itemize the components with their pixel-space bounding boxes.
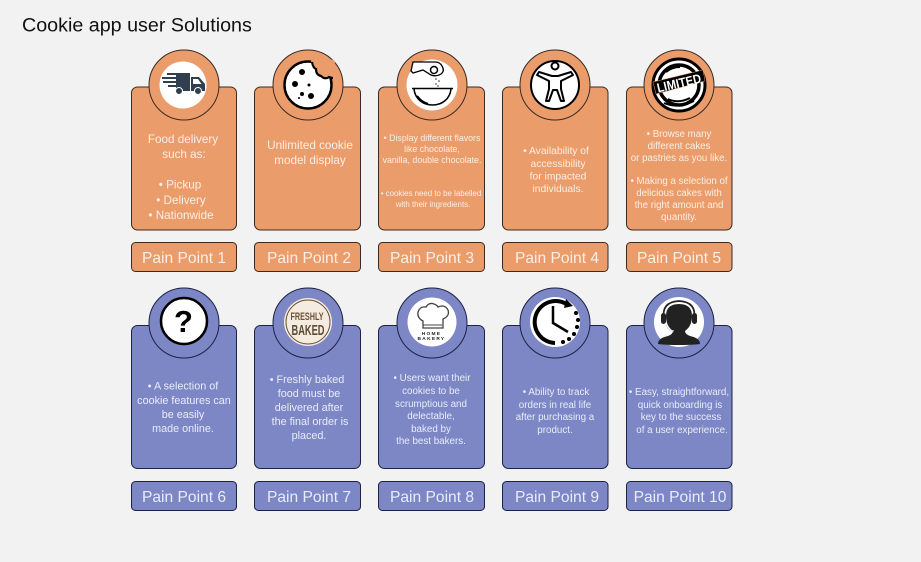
- text: best bakers: delectable,: [407, 411, 455, 422]
- text: delivery options: Food delivery: [148, 133, 218, 146]
- panel: pain point 4: [502, 50, 608, 230]
- text: cookie features: be easily: [162, 409, 205, 421]
- text: accessibility: • Availability of: [523, 146, 589, 157]
- title: Cookie app user Solutions: [22, 14, 252, 36]
- label: pain point 4: [502, 242, 608, 272]
- icon: freshly baked badge: BAKED: [292, 322, 325, 339]
- icon: bitten cookie: [273, 50, 343, 120]
- label: pain point 9: [502, 482, 608, 510]
- panel: pain point 1: [132, 50, 236, 230]
- label: pain point 7: [254, 482, 360, 510]
- label: pain point 2: [254, 242, 360, 272]
- text: fresh delivery: the final order is: [272, 416, 349, 428]
- label: pain point 1: [132, 242, 236, 272]
- text: cookie features: made online.: [152, 423, 214, 435]
- text: flavors and ingredients: with their ingredients.: [395, 200, 470, 209]
- text: flavors and ingredients: vanilla, double chocolate.: [383, 155, 481, 165]
- icon: home bakery logo: [397, 288, 467, 358]
- icon: freshly baked badge: FRESHLY: [290, 311, 324, 323]
- text: fresh delivery: placed.: [292, 430, 326, 442]
- panel: pain point 5: [626, 50, 732, 230]
- text: best bakers: [394, 373, 471, 447]
- text: order tracking: • Ability to track: [523, 387, 589, 398]
- panel: pain point 7: [254, 288, 360, 468]
- text: accessibility: individuals.: [533, 184, 583, 195]
- text: flavors and ingredients: [381, 133, 481, 209]
- label: pain point 10: Pain Point 10: [634, 489, 727, 506]
- icon: home bakery logo: HOME: [422, 331, 441, 337]
- text: delivery options: • Pickup: [159, 178, 202, 192]
- panel: pain point 9: [502, 288, 608, 468]
- text: flavors and ingredients: • Display different flavors: [384, 133, 481, 143]
- text: cookie features: cookie features can: [137, 395, 231, 407]
- icon: home bakery logo: BAKERY: [418, 336, 445, 342]
- label: pain point 7: Pain Point 7: [267, 489, 351, 506]
- text: browse and select: [630, 129, 728, 223]
- text: onboarding: of a user experience.: [636, 425, 728, 436]
- icon: question mark: [149, 288, 219, 358]
- icon: question mark: ?: [174, 304, 193, 339]
- label: pain point 8: [378, 482, 484, 510]
- label: pain point 6: Pain Point 6: [142, 489, 226, 506]
- text: onboarding: [629, 387, 729, 436]
- text: delivery options: • Delivery: [156, 194, 206, 207]
- text: browse and select: different cakes: [648, 141, 711, 152]
- label: pain point 2: Pain Point 2: [267, 250, 351, 267]
- icon: limited stamp: [644, 50, 714, 120]
- text: order tracking: product.: [537, 425, 573, 436]
- text: best bakers: the best bakers.: [396, 436, 466, 447]
- label: pain point 3: Pain Point 3: [390, 250, 474, 267]
- panel: pain point 2: [254, 50, 360, 230]
- text: cookie features: • A selection of: [148, 380, 219, 392]
- label: pain point 3: [378, 242, 484, 272]
- text: onboarding: key to the success: [641, 412, 721, 423]
- icon: hand sprinkling into bowl: [397, 50, 467, 120]
- text: browse and select: • Browse many: [647, 129, 712, 140]
- text: fresh delivery: [270, 374, 349, 442]
- panel: pain point 8: [378, 288, 484, 468]
- text: delivery options: • Nationwide: [148, 209, 214, 222]
- text: fresh delivery: food must be: [278, 388, 340, 400]
- text: fresh delivery: • Freshly baked: [270, 374, 344, 386]
- text: browse and select: the right amount and: [635, 200, 723, 211]
- icon: clock: [520, 288, 590, 358]
- text: cookie display: model display: [274, 154, 346, 167]
- text: onboarding: • Easy, straightforward,: [629, 387, 729, 398]
- text: accessibility: accessibility: [531, 159, 586, 170]
- label: pain point 6: [132, 482, 236, 510]
- text: fresh delivery: delivered after: [275, 402, 344, 414]
- text: onboarding: quick onboarding is: [638, 400, 722, 411]
- text: accessibility: for impacted: [530, 172, 587, 182]
- text: order tracking: [516, 387, 595, 436]
- panel: pain point 6: [132, 288, 236, 468]
- text: browse and select: quantity.: [661, 212, 697, 223]
- panel: pain point 10: [626, 288, 732, 468]
- icon: accessibility figure: [520, 50, 590, 120]
- text: delivery options: such as:: [162, 148, 206, 161]
- label: pain point 10: [626, 482, 732, 510]
- label: pain point 1: Pain Point 1: [142, 250, 226, 267]
- icon: delivery truck: [149, 50, 219, 120]
- label: pain point 9: Pain Point 9: [515, 489, 599, 506]
- text: cookie features: [137, 380, 231, 435]
- text: flavors and ingredients: like chocolate,: [404, 144, 460, 154]
- label: pain point 5: Pain Point 5: [637, 250, 721, 267]
- text: browse and select: • Making a selection of: [630, 176, 728, 187]
- text: best bakers: cookies to be: [402, 386, 460, 397]
- text: browse and select: or pastries as you like.: [631, 153, 727, 164]
- text: best bakers: baked by: [411, 424, 451, 435]
- text: flavors and ingredients: • cookies need to be labelled: [381, 189, 481, 198]
- text: delivery options: [148, 133, 218, 222]
- text: cookie display: [267, 139, 353, 167]
- label: pain point 5: [626, 242, 732, 272]
- text: best bakers: scrumptious and: [395, 399, 467, 410]
- text: order tracking: orders in real life: [519, 400, 592, 411]
- icon: limited stamp: LIMITED: [655, 71, 703, 95]
- text: order tracking: after purchasing a: [516, 412, 595, 423]
- label: pain point 4: Pain Point 4: [515, 250, 599, 267]
- text: accessibility: [523, 146, 589, 195]
- text: best bakers: • Users want their: [394, 373, 471, 384]
- icon: support agent: [644, 288, 714, 358]
- panel: pain point 3: [378, 50, 484, 230]
- text: browse and select: delicious cakes with: [636, 188, 722, 199]
- text: cookie display: Unlimited cookie: [267, 139, 353, 152]
- label: pain point 8: Pain Point 8: [390, 489, 474, 506]
- icon: freshly baked badge: [273, 288, 343, 358]
